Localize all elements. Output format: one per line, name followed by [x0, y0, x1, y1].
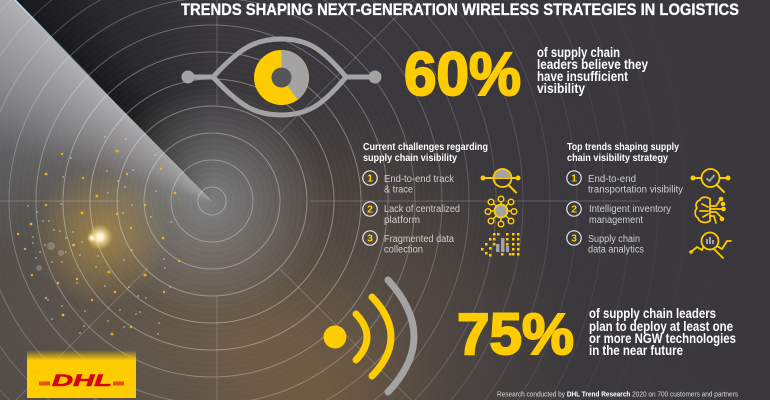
footnote: research source: Research conducted by DHL Trend Research 2020 on 700 customers and partners	[497, 390, 738, 398]
logo: DHL	[27, 350, 136, 398]
list: trend 1: 1	[571, 173, 577, 185]
panel: current challenges	[363, 141, 520, 256]
icon: wireless signal	[324, 280, 414, 392]
panel: top trends	[567, 141, 731, 258]
list: challenge 2: 2	[367, 204, 373, 216]
text: 60% description: leaders believe they	[537, 57, 648, 72]
stat: 60%: 60%	[404, 40, 521, 108]
icon: magnifier with check	[690, 169, 730, 192]
lens flare	[87, 224, 113, 250]
text: 75% description: of supply chain leaders	[589, 306, 716, 321]
icon: eye with 60 percent donut	[182, 39, 382, 115]
icon: network hub	[485, 196, 517, 227]
text: 60% description: have insufficient	[537, 69, 628, 84]
list: challenge 2: Lack of centralized	[384, 204, 460, 215]
list: challenge 1	[363, 171, 455, 196]
text: 75% description: plan to deploy at least one	[589, 319, 733, 334]
icon: circuit brain	[695, 197, 726, 223]
list: challenge 3: Fragmented data	[384, 234, 454, 245]
icon: fragmented data grid	[481, 233, 520, 256]
text: 75% description: in the near future	[589, 343, 683, 358]
heading: top trends	[567, 141, 679, 164]
list: challenge 2	[363, 202, 460, 226]
list: trend 2: 2	[571, 204, 577, 216]
text: 75% description: or more NGW technologies	[589, 331, 736, 346]
heading: current challenges: supply chain visibility	[363, 152, 457, 164]
list: challenge 3: 3	[367, 233, 373, 245]
list: challenge 3: collection	[384, 244, 423, 256]
list: trend 2: Intelligent inventory	[589, 204, 671, 215]
list: trend 3: Supply chain	[588, 234, 640, 245]
beam edge highlight	[15, 0, 110, 97]
logo: DHL: DHL	[52, 371, 112, 390]
list: challenge 1: 1	[367, 173, 373, 185]
list: trend 3: 3	[571, 233, 577, 245]
icon: magnifier on track	[480, 169, 520, 192]
list: trend 1	[567, 171, 683, 196]
list: challenge 1: End-to-end track	[384, 174, 455, 185]
list: trend 2	[567, 202, 671, 226]
sparkle particles	[17, 136, 180, 335]
list: trend 1: End-to-end	[588, 174, 636, 185]
list: trend 2: management	[589, 215, 643, 226]
stat: 75%: 75%	[457, 302, 574, 367]
icon: analytics magnifier	[689, 232, 731, 258]
text: 60% description: of supply chain	[537, 45, 620, 60]
text: 75% description	[589, 306, 736, 358]
list: trend 3	[567, 231, 644, 256]
heading: current challenges	[363, 141, 488, 164]
list: challenge 1: & trace	[384, 184, 413, 196]
list: challenge 3	[363, 231, 454, 256]
text: 60% description: visibility	[537, 81, 585, 96]
heading: top trends: chain visibility strategy	[567, 152, 668, 164]
text: 60% description	[537, 45, 648, 96]
list: trend 3: data analytics	[588, 244, 644, 256]
list: trend 1: transportation visibility	[588, 184, 683, 196]
list: challenge 2: platform	[384, 215, 420, 226]
heading: top trends: Top trends shaping supply	[567, 141, 679, 153]
heading: current challenges: Current challenges regarding	[363, 141, 488, 153]
